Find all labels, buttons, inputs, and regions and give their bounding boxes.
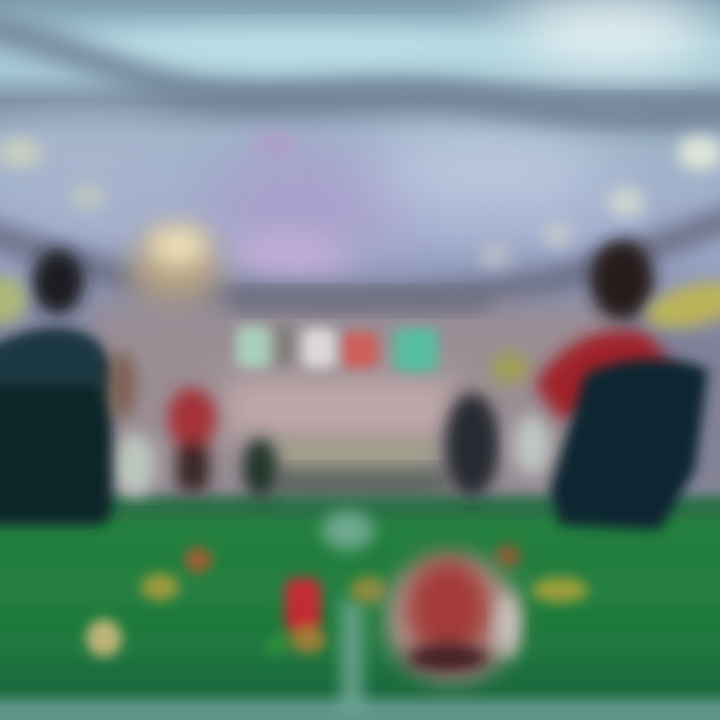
- stadium floodlights: [0, 133, 720, 267]
- sun glare: [129, 226, 221, 316]
- stadium roof band: [0, 25, 720, 301]
- left edge light: [0, 276, 26, 324]
- red card marker: [267, 578, 326, 656]
- background players: [115, 352, 550, 498]
- field markers: [86, 544, 588, 657]
- field: [0, 496, 720, 720]
- crowd stands: [90, 292, 630, 496]
- left foreground spectator: [0, 250, 136, 525]
- scoreboard screens: [236, 325, 438, 372]
- football: [386, 556, 519, 680]
- right foreground spectator: [535, 240, 720, 530]
